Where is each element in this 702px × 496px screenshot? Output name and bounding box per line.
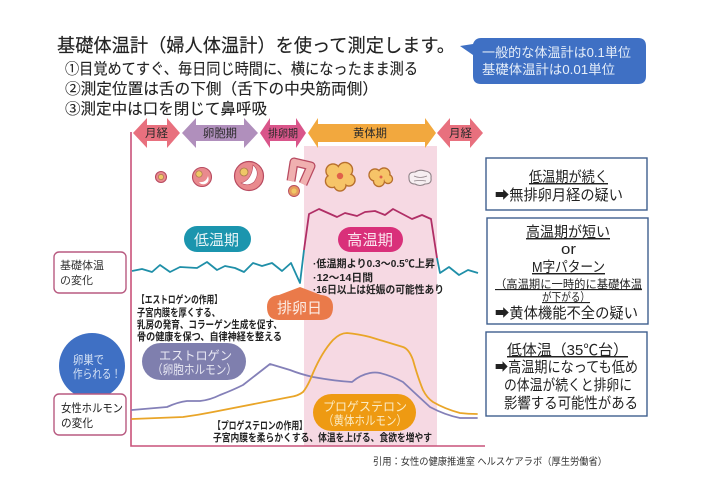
box: short high temperature: or xyxy=(561,242,576,258)
high temperature luteal line xyxy=(304,209,437,258)
estrogen line 3: 骨の健康を保つ、自律神経を整える xyxy=(137,330,282,343)
arrow: menstruation 2: 月経 xyxy=(449,127,472,140)
high temperature phase notes xyxy=(313,257,444,296)
box: short high temperature: 高温期が短い xyxy=(526,224,610,241)
arrow: menstruation xyxy=(133,118,180,148)
pill: low temperature phase xyxy=(184,226,251,252)
callout line 2: 基礎体温計は0.01単位 xyxy=(482,62,615,77)
instruction 1: ①目覚めてすぐ、毎日同じ時間に、横になったまま測る xyxy=(65,60,418,78)
citation: 引用：女性の健康推進室 ヘルスケアラボ（厚生労働省） xyxy=(373,455,607,468)
pill: estrogen: （卵胞ホルモン） xyxy=(152,363,237,377)
title: 基礎体温計（婦人体温計）を使って測定します。 xyxy=(57,35,455,56)
arrow: menstruation 2 xyxy=(437,118,483,148)
icon: corpus luteum large xyxy=(326,162,355,191)
measurement instructions xyxy=(65,60,418,118)
arrow: follicular phase xyxy=(182,118,258,148)
pill: progesterone: プロゲステロン xyxy=(323,400,407,414)
icon: corpus luteum small xyxy=(369,168,392,186)
label: basal body temperature change: の変化 xyxy=(60,274,93,287)
pill: high temperature phase xyxy=(338,227,403,252)
label: female hormone change: の変化 xyxy=(61,417,93,430)
pill: estrogen: エストロゲン xyxy=(159,349,232,363)
circle: made in ovaries: 卵巣で xyxy=(73,353,104,367)
box: low body temperature xyxy=(486,332,647,416)
phase arrows xyxy=(133,118,483,148)
progesterone heading: 【プロゲステロンの作用】 xyxy=(213,419,307,432)
label: basal body temperature change xyxy=(54,252,126,293)
progesterone line: 子宮内膜を柔らかくする、体温を上げる、食欲を増やす xyxy=(213,431,432,444)
instruction 2: ②測定位置は舌の下側（舌下の中央筋両側） xyxy=(65,80,378,98)
box: low body temperature: の体温が続くと排卵に xyxy=(504,377,632,394)
label: female hormone change: 女性ホルモン xyxy=(61,401,123,415)
box: prolonged low temperature xyxy=(486,158,647,210)
estrogen action text xyxy=(137,293,282,343)
circle: made in ovaries xyxy=(59,333,125,399)
box: short high temperature: ➡黄体機能不全の疑い xyxy=(495,305,638,322)
icon: growing follicle xyxy=(192,168,212,186)
follicle and corpus luteum icons xyxy=(156,162,431,196)
arrow: ovulation phase xyxy=(260,118,306,148)
estrogen heading: 【エストロゲンの作用】 xyxy=(137,293,222,306)
box: low body temperature: 影響する可能性がある xyxy=(504,395,638,412)
pill: low temperature phase: 低温期 xyxy=(194,232,239,249)
box: short high temperature: （高温期に一時的に基礎体温 xyxy=(495,277,642,291)
note 1: ·低温期より0.3～0.5℃上昇 xyxy=(313,257,435,270)
progesterone curve xyxy=(132,333,477,419)
ovulation day callout: 排卵日 xyxy=(277,300,322,317)
note 3: ·16日以上は妊娠の可能性あり xyxy=(313,283,444,296)
callout: thermometer precision xyxy=(460,38,646,84)
luteal phase band xyxy=(304,146,437,446)
pill: estrogen xyxy=(142,343,246,380)
icon: ovulation xyxy=(288,162,311,196)
instruction 3: ③測定中は口を閉じて鼻呼吸 xyxy=(65,100,267,118)
pill: progesterone: （黄体ホルモン） xyxy=(323,414,407,428)
box: prolonged low temperature: 低温期が続く xyxy=(529,169,608,186)
box: prolonged low temperature: ➡無排卵月経の疑い xyxy=(495,187,623,204)
box: short high temperature: が下がる） xyxy=(542,290,590,304)
ovulation day callout xyxy=(267,287,333,320)
arrow: luteal phase xyxy=(308,118,436,148)
label: basal body temperature change: 基礎体温 xyxy=(60,258,104,272)
callout line 1: 一般的な体温計は0.1単位 xyxy=(482,45,631,60)
estrogen line 2: 乳房の発育、コラーゲン生成を促す、 xyxy=(137,318,282,331)
arrow: luteal phase: 黄体期 xyxy=(353,126,387,140)
hormone curves xyxy=(132,333,477,419)
chart axes xyxy=(131,132,485,446)
note 2: ·12～14日間 xyxy=(313,272,373,284)
arrow: follicular phase: 卵胞期 xyxy=(203,126,237,140)
estrogen curve xyxy=(132,364,477,418)
estrogen line 1: 子宮内膜を厚くする、 xyxy=(137,306,220,319)
box: low body temperature: 低体温（35℃台） xyxy=(507,342,628,359)
circle: made in ovaries: 作られる！ xyxy=(73,367,121,381)
icon: primary follicle xyxy=(156,172,166,182)
label: female hormone change xyxy=(54,394,126,435)
box: short high temperature: M字パターン xyxy=(532,259,605,276)
icon: corpus albicans xyxy=(409,170,431,186)
pill: high temperature phase: 高温期 xyxy=(347,232,393,249)
icon: mature follicle xyxy=(234,162,264,190)
low temperature follicular line xyxy=(132,250,304,283)
box: short high temperature xyxy=(487,218,648,324)
box: low body temperature: ➡高温期になっても低め xyxy=(495,359,638,376)
arrow: menstruation: 月経 xyxy=(145,127,168,140)
pill: progesterone xyxy=(313,394,416,431)
low temperature post line xyxy=(437,258,478,275)
temperature curve xyxy=(132,209,478,283)
progesterone action text xyxy=(213,419,432,444)
arrow: ovulation phase: 排卵期 xyxy=(268,126,298,140)
